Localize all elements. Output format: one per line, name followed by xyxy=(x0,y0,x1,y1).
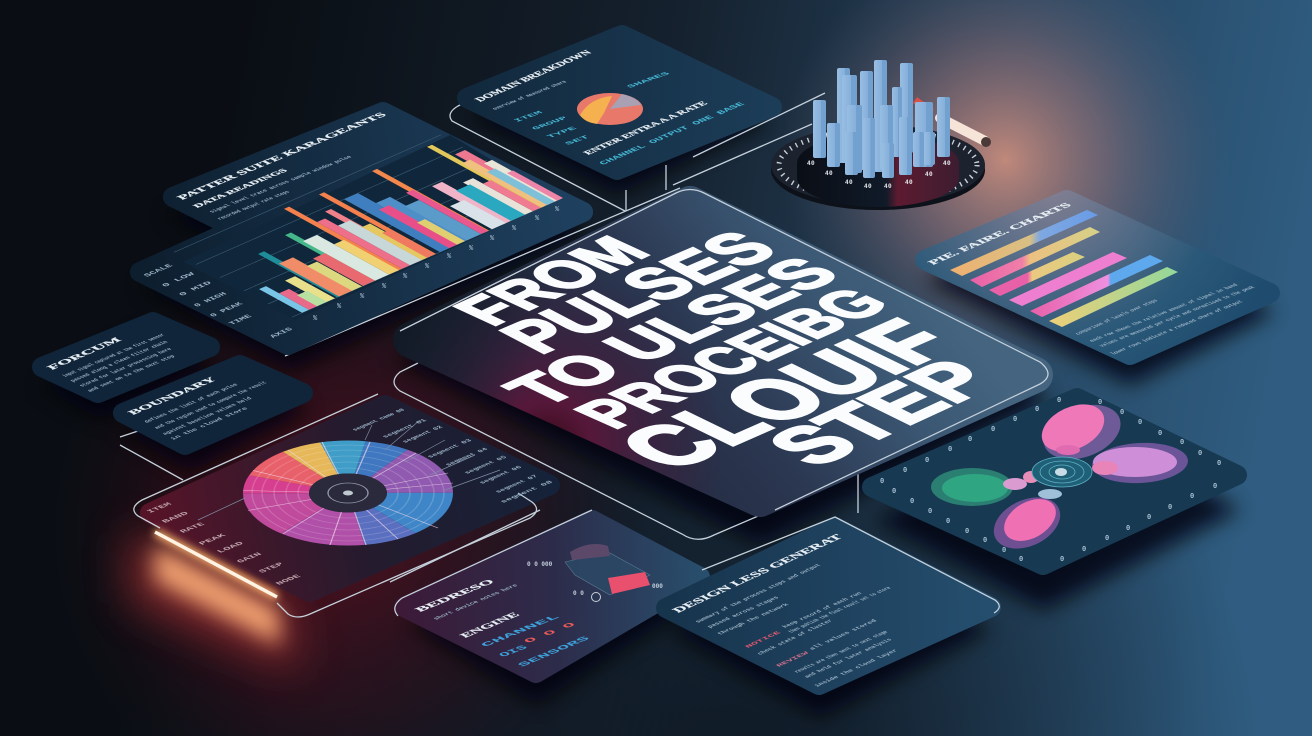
teal labels: GROUP xyxy=(531,116,572,131)
panel: centre title board xyxy=(393,186,1053,518)
description xyxy=(143,381,269,441)
description: passed along a clean filter chain xyxy=(69,340,170,383)
coloured labels: OIS xyxy=(496,644,531,658)
heading: DOMAIN BREAKDOWN xyxy=(473,49,595,103)
title: FROM xyxy=(437,228,665,333)
description: inside the cloud layer xyxy=(813,648,900,688)
cylinder bar chart xyxy=(771,60,991,210)
heading: DESIGN LESS GENERAT xyxy=(669,533,846,614)
description: NOTICE xyxy=(744,630,783,649)
title: PULSES xyxy=(484,222,794,362)
description: keep record of each run xyxy=(781,591,864,629)
coloured labels: CHANNEL xyxy=(478,613,563,648)
value labels: 4040404040404040 xyxy=(807,160,951,190)
right labels: segment 03 xyxy=(426,438,474,459)
left labels xyxy=(146,502,304,586)
legend labels: SCALE xyxy=(143,263,176,278)
title: TO ULSES xyxy=(489,249,856,414)
coloured labels xyxy=(478,613,593,668)
panel: description card xyxy=(666,517,999,688)
coloured labels: SENSORS xyxy=(515,635,593,668)
description: signal level trace across sample window pulse xyxy=(208,155,354,214)
title: CLOUIF xyxy=(596,309,978,481)
heading: PATTER SUITE KARAGEANTS xyxy=(175,111,390,201)
panel: top-left bar chart xyxy=(140,111,583,345)
card outline xyxy=(702,517,999,613)
legend labels: AXIS xyxy=(269,327,296,339)
tube light xyxy=(915,100,991,147)
connector frames xyxy=(120,93,858,582)
bar chart xyxy=(174,133,563,317)
description: values are measured per cycle and normalised to the peak xyxy=(1098,285,1257,348)
device illustration: 0 0 xyxy=(573,590,584,597)
right labels: segment 01 xyxy=(381,418,429,439)
right labels: segment 02 xyxy=(401,425,445,444)
description: in the cloud store xyxy=(169,406,250,441)
right labels: segment 05 xyxy=(463,455,509,475)
left labels: BAND xyxy=(161,511,192,524)
title xyxy=(437,222,1017,481)
panel: left small note two xyxy=(123,365,303,445)
left labels: GAIN xyxy=(236,552,265,564)
panel: top overview card xyxy=(467,35,772,170)
centre hub xyxy=(1032,457,1092,487)
heading: FORCUM xyxy=(45,336,125,371)
description: overview of measured share xyxy=(491,80,569,111)
description xyxy=(208,155,354,221)
heading: PIE. FAIRE. CHARTS xyxy=(926,202,1075,266)
description: and held for later analysis xyxy=(803,638,894,679)
right labels: segment name 00 xyxy=(351,408,407,432)
subheading: DATA READINGS xyxy=(191,167,290,209)
left labels: LOAD xyxy=(216,541,247,554)
description: and sent on to the next step xyxy=(86,354,177,393)
description: defines the limit of each pulse xyxy=(143,383,240,424)
card frame xyxy=(134,394,378,528)
device illustration: 000 xyxy=(652,583,663,590)
legend labels: 0 HIGH xyxy=(193,292,230,308)
description: short device notes here xyxy=(432,583,520,621)
leader lines xyxy=(198,420,500,520)
drum xyxy=(797,134,959,207)
panel: device card xyxy=(395,510,700,673)
description: through the network xyxy=(716,602,791,636)
description: results are then sent to next stage xyxy=(793,630,890,674)
panel: right bar card xyxy=(925,200,1270,356)
description xyxy=(694,563,900,688)
description xyxy=(61,333,177,393)
description: then publish the final result set to store xyxy=(787,586,893,634)
petal: right xyxy=(1091,441,1189,485)
description: and the region used to compare the result xyxy=(153,381,269,430)
description: comparison of levels over steps xyxy=(1074,298,1160,336)
description: check state of cluster xyxy=(756,618,835,656)
panel: petal diagram xyxy=(872,395,1237,565)
left labels: NODE xyxy=(275,574,304,586)
glow under light bar xyxy=(130,530,300,670)
radial wheel xyxy=(243,442,453,545)
card outline xyxy=(395,510,592,616)
description: input signal captured at the first sensor xyxy=(61,333,167,378)
title: PROCEIBG xyxy=(559,281,906,436)
right labels xyxy=(351,408,555,504)
teal labels: SET xyxy=(564,135,594,146)
left labels: ITEM xyxy=(146,502,175,514)
coloured labels: O O O xyxy=(521,621,579,644)
legend labels: TIME xyxy=(228,314,255,326)
description: each row shows the relative amount of signal in band xyxy=(1088,283,1240,343)
legend labels: 0 PEAK xyxy=(209,301,246,318)
sub heading: ENGINE xyxy=(458,611,523,639)
columns xyxy=(813,60,950,178)
pie chart xyxy=(577,93,643,125)
right labels: segment 07 xyxy=(494,474,540,494)
description: recorded output rate steps xyxy=(216,190,292,221)
petal: bottom xyxy=(986,487,1068,559)
description: passed across stages xyxy=(706,595,781,629)
petal: top xyxy=(1034,395,1128,469)
horizontal bars xyxy=(950,210,1178,327)
legend labels xyxy=(143,263,296,339)
teal labels xyxy=(513,71,748,166)
description: all values stored xyxy=(808,619,879,651)
legend labels: 0 MID xyxy=(178,280,215,297)
tick ring xyxy=(779,130,977,200)
legend labels: 0 LOW xyxy=(161,271,198,288)
device illustration xyxy=(527,544,663,602)
left labels: STEP xyxy=(258,562,287,574)
edge ticks: 00000000000000000000000000000000 xyxy=(880,397,1221,564)
description: against baseline values held xyxy=(161,396,254,436)
teal labels: CHANNEL OUTPUT ONE BASE xyxy=(597,101,748,166)
teal labels: ITEM xyxy=(513,110,546,123)
board edge highlight xyxy=(400,190,1048,510)
teal labels: ENTER ENTRA A A RATE xyxy=(582,100,711,156)
left labels: RATE xyxy=(179,522,208,534)
title: STEP xyxy=(747,349,1017,476)
right labels: segment 04 xyxy=(444,447,490,467)
description: stored for later processing here xyxy=(78,347,174,388)
petal: left xyxy=(931,468,1039,506)
light bar xyxy=(155,532,277,597)
device illustration: 0 0 000 xyxy=(527,561,553,568)
left labels: PEAK xyxy=(198,533,229,546)
description xyxy=(1074,283,1257,356)
description: summary of the process steps and output xyxy=(694,563,823,624)
heading: BEDRESO xyxy=(413,579,498,613)
teal labels: SHARES xyxy=(626,71,674,89)
right labels: segment 08 xyxy=(499,480,555,504)
panel: left small note xyxy=(42,322,210,393)
panel: pie wheel card xyxy=(134,394,555,617)
heading: BOUNDARY xyxy=(126,376,220,416)
axis labels: %%%%%%%%%%%% xyxy=(313,206,560,323)
teal labels: TYPE xyxy=(546,126,581,139)
description: REVIEW xyxy=(775,651,811,668)
description: lower rows indicate a reduced share of output xyxy=(1109,299,1245,356)
right labels: segment 06 xyxy=(478,465,524,485)
